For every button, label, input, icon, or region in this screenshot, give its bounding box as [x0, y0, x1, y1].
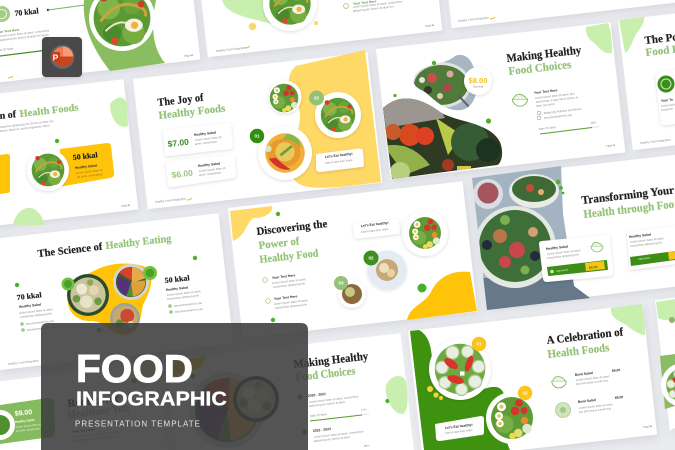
product card 1: Approved	[556, 268, 568, 273]
title: Transforming Your	[581, 185, 675, 207]
list item 2: consectetur adipiscing elit	[275, 302, 307, 310]
slide: a celebration of health foods: Page ■	[643, 424, 652, 429]
50 kkal column: 50 kkal	[164, 273, 190, 285]
menu item 1: Dui sed neque a velit mus	[576, 378, 609, 386]
menu item 1	[552, 368, 621, 388]
slide: making healthy food choices: Page ■	[606, 143, 615, 148]
price card 7.00	[163, 123, 233, 156]
speech bubble: Carrot cake liver chips	[325, 158, 353, 165]
price circle: Nominal	[473, 84, 484, 88]
slide: the power of food: Healthy Food Infographic	[640, 137, 672, 145]
badge 02: 02	[368, 256, 374, 261]
slide: rediscover a healthier you: Lorem ipsum dolor sit amet, consectetur	[72, 429, 122, 439]
badge 01: 01	[476, 342, 482, 347]
icon: powerpoint badge: P	[53, 52, 59, 62]
timeline 2022: 2022 - 2023	[313, 427, 331, 433]
menu item 1: Bowl Salad	[575, 371, 593, 377]
slide: creation of health foods: Page ■	[121, 203, 130, 208]
text block	[534, 88, 597, 131]
slide: rediscover a healthier you: Rediscover	[67, 392, 120, 410]
menu item 2: $8.00	[615, 395, 624, 400]
plate 02	[486, 392, 538, 444]
photo: salads on table	[472, 166, 590, 310]
slide: top right	[437, 0, 675, 28]
speech bubble	[353, 219, 400, 239]
timeline 2022	[303, 427, 370, 448]
slide: kkal with green blob plate: te Of Taste	[0, 46, 14, 52]
70 kkal column: 70 kkal	[16, 290, 42, 302]
badge 02: 02	[314, 96, 319, 100]
text block: Recommended for you	[544, 113, 573, 120]
title: Healthy Food	[259, 247, 319, 266]
slide: the science of healthy eating: Healthy Food Infographic	[8, 358, 40, 366]
green price box: Lorem ipsum dolor sit	[16, 422, 41, 429]
slide: top centre plate	[193, 0, 442, 57]
slide: the power of food	[618, 0, 675, 150]
plate 02	[368, 250, 406, 290]
slide: creation of health foods	[0, 79, 138, 236]
speech bubble: Let's Eat healthy!	[361, 221, 389, 228]
plate 01	[429, 338, 491, 400]
slide: transforming your health through food	[470, 151, 675, 318]
bowls	[67, 264, 149, 333]
title: Food Choices	[508, 59, 572, 78]
speech bubble: Let's Eat healthy!	[325, 152, 353, 159]
product card 2: Healthy Salad	[629, 233, 651, 239]
timeline 2020: 2020 - 2021	[308, 392, 326, 398]
price card 7.00: amet, consectetur	[195, 139, 217, 146]
title: Power of	[258, 235, 300, 252]
slide: a celebration of health foods	[408, 304, 657, 450]
plate 03	[338, 280, 366, 308]
title	[293, 351, 369, 384]
title: Healthy Eating	[105, 233, 173, 252]
menu item 2: Dui sed neque a velit mus	[579, 406, 612, 414]
70 kkal column: consectetur adipiscing elit	[20, 311, 52, 319]
title: Health Foods	[547, 342, 610, 361]
text block: Your Text Here	[534, 88, 558, 95]
price card 7.00: Lorem ipsum dolor sit	[195, 135, 222, 142]
badge 03	[334, 276, 348, 290]
timeline 2020	[298, 392, 369, 421]
slide: rediscover a healthier you	[0, 363, 167, 450]
50 kkal column: Recommended for you	[174, 301, 203, 308]
slide: the joy of healthy foods	[133, 50, 382, 209]
product card 1: Lorem ipsum dolor sit amet,	[547, 248, 582, 256]
text block: Balancing Nutrition and flavors	[544, 107, 582, 115]
title: Discovering the	[256, 218, 328, 238]
speech bubble: Carrot cake liver chips	[361, 227, 389, 234]
badge 02	[518, 386, 532, 400]
50 kkal column	[164, 273, 204, 314]
green price box: $9.00	[14, 409, 33, 418]
text block: dolor non amet	[536, 102, 555, 108]
price card 6.00: Lorem ipsum dolor sit	[199, 166, 226, 173]
list item 1: Your Text Here	[272, 273, 296, 280]
title	[256, 218, 328, 266]
product card 2: consectetur adipiscing elit	[630, 240, 662, 248]
price card 6.00	[166, 155, 236, 187]
slide: kkal with green blob plate: ur Text Here	[0, 28, 20, 34]
product card 1: consectetur adipiscing elit	[547, 252, 579, 260]
slide: creation of health foods: Lorem ipsum dolor sit	[76, 168, 103, 175]
slide: the joy of healthy foods: Healthy Food Infographic	[155, 196, 187, 204]
menu item 2: Bowl Salad	[578, 398, 596, 404]
dark green blob	[410, 330, 510, 450]
badges	[62, 266, 157, 290]
slide: creation of health foods: Health Foods	[19, 102, 79, 120]
slide: discovering the power of healthy food	[228, 181, 477, 338]
timeline 2020: 47%	[361, 407, 367, 412]
70 kkal column: Lorem ipsum dolor sit amet,	[19, 307, 54, 315]
title	[506, 45, 582, 78]
slide: kkal with green blob plate: Lorem ipsum dolor sit amet, consectetur	[0, 28, 50, 38]
icon: powerpoint badge	[42, 37, 82, 77]
product card 2: Lorem ipsum dolor sit amet,	[630, 236, 665, 244]
title: Making Healthy	[506, 45, 582, 65]
title: INFOGRAPHIC: INFOGRAPHIC	[76, 388, 227, 410]
yellow blob	[289, 50, 381, 188]
price card 6.00: Healthy Salad	[198, 162, 220, 168]
slide: top centre plate: adipiscing elit. Donec at diam leo	[353, 4, 394, 13]
slide: kkal with green blob plate: 70 kkal	[14, 6, 40, 18]
icon: bowl	[512, 94, 528, 106]
price card 6.00: amet, consectetur	[199, 170, 221, 177]
menu item 1: $9.00	[612, 368, 621, 373]
plate: 01	[258, 126, 312, 180]
slide: making healthy food choices	[376, 22, 625, 185]
product card 2: Approved	[638, 256, 650, 261]
price card 6.00: $6.00	[171, 168, 194, 180]
badge 01: 01	[254, 134, 260, 138]
timeline 2022: 58%	[364, 443, 370, 448]
slide: creation of health foods: mascetur adipiscing elit. Donec at dolor nisi	[0, 119, 54, 129]
green price box: do amet, consectetur	[16, 426, 40, 433]
70 kkal column: Healthy Salad	[19, 303, 41, 309]
title panel	[41, 323, 308, 450]
timeline 2020: adipiscing elit. Donec at diam	[309, 400, 346, 408]
menu item 2: Lorem ipsum dolor sit amet	[579, 402, 613, 410]
text block: 90%	[591, 120, 597, 125]
speech bubble: Let's Eat healthy!	[445, 423, 473, 430]
title: Healthy Foods	[158, 102, 227, 122]
list item 2	[266, 294, 309, 310]
title: A Celebration of	[546, 326, 624, 347]
text block: and tempor a nam lorem Donec et	[536, 95, 579, 104]
slide: the science of healthy eating	[0, 213, 233, 370]
yellow blob	[68, 264, 151, 335]
timeline 2022: Lorem ipsum dolor sit amet, consectetur	[314, 429, 364, 439]
slide: kkal with green blob plate	[0, 0, 200, 86]
price circle	[464, 67, 492, 95]
badge 01	[250, 129, 264, 143]
title: Making Healthy	[293, 351, 369, 371]
progress bar	[540, 126, 599, 134]
title: Food Choices	[295, 365, 356, 384]
timeline 2022: adipiscing elit. Donec at diam	[314, 435, 351, 443]
slide: far right partial	[655, 298, 675, 430]
speech bubble	[435, 416, 484, 441]
list item 2: Lorem ipsum dolor sit amet,	[274, 298, 309, 306]
50 kkal column: Recommended for you	[175, 307, 204, 314]
subtitle: PRESENTATION TEMPLATE	[75, 420, 200, 428]
title	[37, 233, 173, 260]
price circle: $8.00	[469, 76, 487, 85]
green price box	[0, 398, 55, 444]
price card 7.00: Healthy Salad	[194, 131, 216, 137]
badge 02	[309, 90, 324, 106]
50 kkal column: Healthy Salad	[166, 286, 188, 292]
product card 1: $8.00	[589, 265, 598, 270]
list item 1: Lorem ipsum dolor sit amet,	[272, 277, 307, 285]
badge 01	[472, 337, 486, 351]
price card 7.00: $7.00	[167, 137, 190, 149]
slide: making healthy food choices timeline	[132, 333, 414, 450]
green price box: Healthy Salad	[15, 418, 35, 424]
slide: creation of health foods: do amet, consectetur	[77, 172, 103, 179]
slide: creation of health foods: auctor, libero ac, auctor dignissim, libero	[0, 123, 50, 133]
list item 1: consectetur adipiscing elit	[273, 281, 305, 289]
product card 1	[539, 235, 613, 282]
title	[157, 92, 227, 122]
title: The Joy of	[157, 92, 204, 109]
badge 02	[364, 250, 378, 266]
slide: top centre plate: Healthy Food Infographic	[216, 45, 248, 53]
list item 1	[263, 273, 307, 289]
70 kkal column: Recommended for you	[26, 319, 55, 326]
speech bubble	[316, 148, 364, 172]
product card 1: Healthy Salad	[546, 245, 568, 251]
title	[546, 326, 624, 361]
menu item 1: Lorem ipsum dolor sit amet	[576, 374, 610, 382]
plate: egg salad	[268, 80, 302, 114]
menu item 2	[556, 395, 624, 418]
text block: Lorem ipsum dolor sit amet, Qui	[535, 91, 575, 100]
slide: creation of health foods: 50 kkal	[72, 150, 98, 162]
slide: kkal with green blob plate: Page ■	[184, 53, 193, 58]
plate: 02	[315, 92, 361, 138]
text block: Rate Of Taste	[539, 125, 556, 131]
slide: the power of food: Your Te	[661, 98, 673, 103]
slide: creation of health foods: Healthy Salad	[75, 164, 97, 170]
timeline 2020: Rate Of Taste	[310, 412, 327, 418]
list item 2: Your Text Here	[274, 294, 298, 301]
badge 03: 03	[338, 281, 344, 286]
slide: the power of food: consectet	[661, 107, 673, 112]
photo: salad blob small	[414, 54, 476, 110]
slide: kkal with green blob plate: adipiscing elit. Donec at diam leo ipsum	[0, 32, 50, 42]
slide: rediscover a healthier you: Your Text Here	[72, 427, 96, 434]
speech bubble: Carrot cake liver chips	[445, 428, 473, 435]
50 kkal column: consectetur adipiscing elit	[167, 293, 199, 301]
plate 01	[402, 210, 448, 256]
50 kkal column: Lorem ipsum dolor sit amet,	[167, 289, 202, 297]
title: The Science of	[37, 242, 103, 260]
timeline 2020: Lorem ipsum dolor sit amet, consectetur	[309, 394, 359, 404]
70 kkal column	[16, 290, 56, 332]
slide: top right: Healthy Food Infographic	[458, 15, 490, 23]
slide: rediscover a healthier you: adipiscing elit. Donec at diam leo	[73, 434, 114, 443]
badge 02: 02	[522, 391, 528, 396]
product card 2	[627, 226, 675, 270]
slide: top centre plate: Page ■	[425, 23, 434, 28]
photo: large salad blob	[383, 98, 502, 179]
70 kkal column: Recommended for you	[27, 325, 56, 332]
title	[581, 185, 675, 221]
title: FOOD: FOOD	[76, 348, 193, 391]
slide: rediscover a healthier you: Healthier You	[67, 402, 130, 421]
